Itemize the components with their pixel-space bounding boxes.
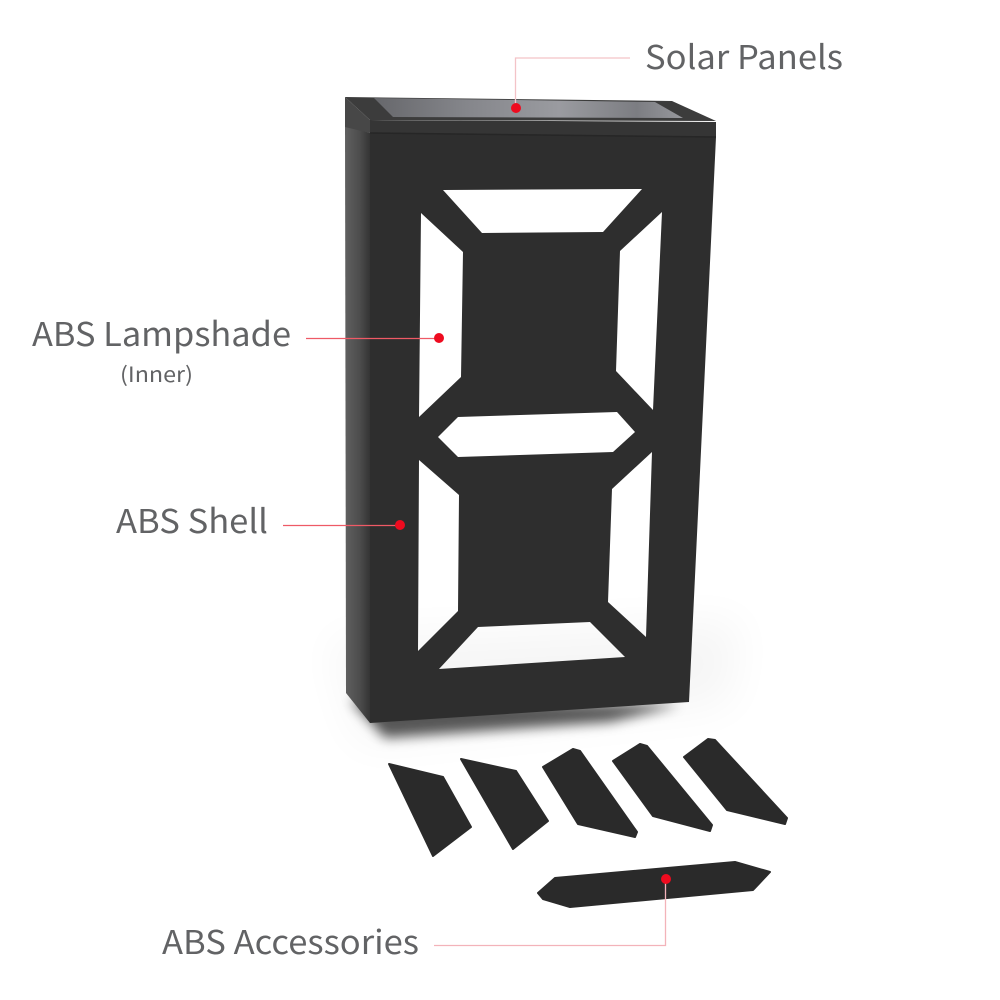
stake accessories [389, 739, 787, 907]
stake 5 [684, 739, 787, 824]
stake 1 [389, 764, 471, 856]
top cap [345, 97, 716, 137]
solar light housing [345, 97, 716, 723]
callout: ABS Accessories: ABS Accessories [162, 916, 419, 964]
stake 2 [461, 759, 548, 849]
callout: ABS Shell: ABS Shell [116, 495, 268, 543]
callout: ABS Lampshade [32, 308, 444, 389]
callout: ABS Lampshade: ABS Lampshade [32, 308, 291, 356]
stake 3 [543, 749, 637, 837]
front face with windows [370, 133, 716, 723]
side face [345, 125, 370, 723]
callout: ABS Shell [116, 495, 405, 543]
callout: Solar Panels: Solar Panels [645, 31, 843, 79]
callout: ABS Accessories [162, 874, 671, 964]
callout: ABS Lampshade: (Inner) [120, 359, 193, 389]
callout: Solar Panels [511, 31, 843, 113]
solar panel [374, 98, 683, 118]
stake 4 [613, 744, 712, 831]
ground shadow [330, 620, 740, 745]
long bar accessory [538, 862, 770, 907]
